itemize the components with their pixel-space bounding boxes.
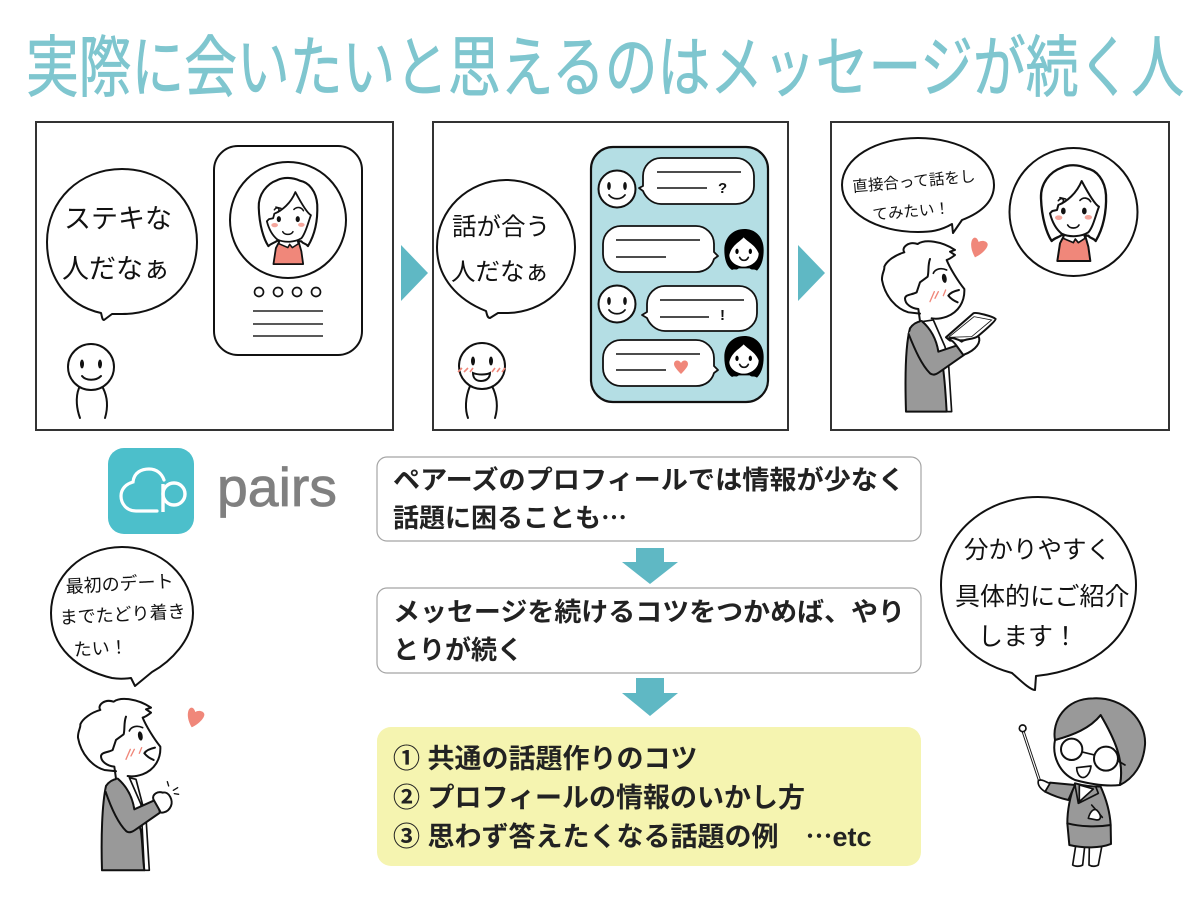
text box: solution: とりが続く (393, 635, 523, 665)
title: 実際に会いたいと思えるのはメッセージが続く人 (26, 30, 1184, 105)
speech bubble: 話が合う人だなぁ: 人だなぁ (451, 259, 549, 286)
chat row 3: ! (720, 307, 725, 324)
logo: pairs (108, 448, 337, 534)
text box: problem (377, 457, 921, 541)
panel: messaging (433, 122, 788, 430)
highlight box: tips list (377, 727, 921, 866)
panel: first impression (36, 122, 393, 430)
figure: man with fist (78, 699, 179, 870)
text box: solution: メッセージを続けるコツをつかめば、やり (393, 597, 905, 627)
figure: smiling person (68, 344, 114, 418)
figure: teacher with pointer (1019, 698, 1145, 866)
left speech bubble: 最初のデート (65, 571, 174, 597)
pointer (1019, 725, 1039, 780)
icon: woman portrait (259, 178, 317, 264)
left speech bubble: たい！ (73, 637, 128, 660)
icon: heart (188, 708, 204, 727)
profile card (214, 146, 362, 355)
speech bubble: 話が合う人だなぁ (437, 180, 575, 318)
arrow: down (622, 548, 678, 584)
icon: heart (971, 238, 988, 257)
chat row 3 (598, 286, 757, 331)
speech bubble: 話が合う人だなぁ: 話が合う (452, 213, 550, 241)
highlight box: tips list: ② プロフィールの情報のいかし方 (393, 783, 805, 813)
icon: pairs app icon (108, 448, 194, 534)
text box: problem: ペアーズのプロフィールでは情報が少なく (393, 465, 905, 495)
figure: happy person (458, 343, 505, 418)
speech bubble: ステキな人だなぁ: ステキな (64, 204, 172, 234)
phone chat screen (591, 147, 768, 402)
speech bubble: 直接合って話をしてみたい (842, 138, 994, 233)
panel: wanting to meet (831, 122, 1169, 430)
icon: heart (674, 360, 688, 374)
text box: problem: 話題に困ることも… (393, 498, 627, 535)
speech bubble: 直接合って話をしてみたい: 直接合って話をし (852, 167, 976, 196)
right speech bubble (941, 497, 1136, 690)
circle: woman portrait (1010, 148, 1138, 276)
highlight box: tips list: ① 共通の話題作りのコツ (393, 744, 698, 774)
speech bubble: ステキな人だなぁ: 人だなぁ (62, 254, 170, 284)
chat row 4 (603, 336, 764, 386)
arrow: right (798, 245, 825, 301)
speech bubble: 直接合って話をしてみたい: てみたい！ (872, 199, 951, 224)
right speech bubble: します！ (978, 623, 1078, 651)
right speech bubble: 分かりやすく (964, 537, 1111, 564)
chat row 2 (603, 226, 764, 272)
left speech bubble: までたどり着き (59, 601, 186, 628)
profile text lines (253, 311, 323, 336)
text box: solution (377, 588, 921, 673)
rating circles (254, 288, 320, 296)
arrow: right (401, 245, 428, 301)
speech bubble: ステキな人だなぁ (47, 169, 197, 320)
chat row 1 (598, 158, 754, 208)
left speech bubble (51, 547, 193, 686)
chat row 1: ? (718, 180, 727, 197)
right speech bubble: 具体的にご紹介 (955, 583, 1130, 611)
figure: man holding phone (882, 241, 996, 412)
highlight box: tips list: ③ 思わず答えたくなる話題の例 …etc (393, 815, 872, 854)
wordmark: pairs (217, 456, 337, 518)
arrow: down (622, 678, 678, 716)
